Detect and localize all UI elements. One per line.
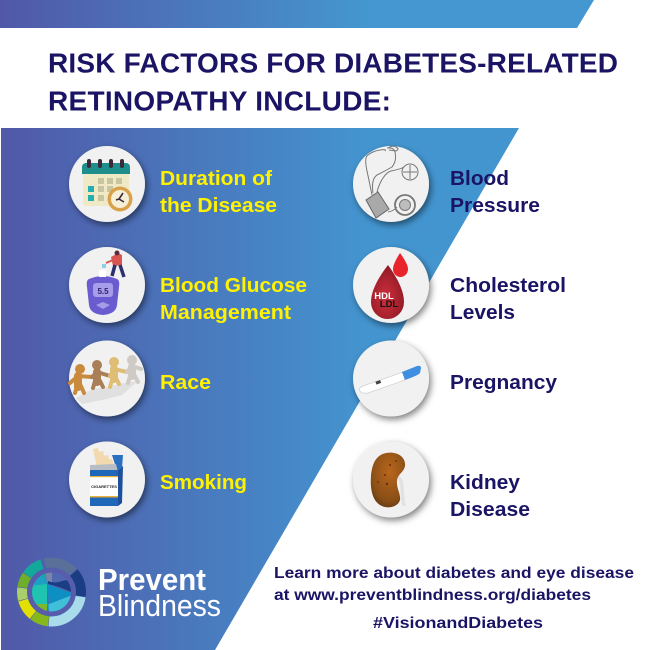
logo wordmark: Prevent: [98, 562, 206, 597]
label: kidney disease: [450, 471, 530, 521]
logo mark: [22, 562, 81, 622]
label: smoking: Smoking: [160, 471, 247, 494]
icon: blood pressure cuff: [353, 146, 429, 222]
icon: pregnancy test: [353, 340, 429, 416]
label: kidney disease: Disease: [450, 498, 530, 521]
call to action text: #VisionandDiabetes: [373, 615, 543, 632]
label: pregnancy: Pregnancy: [450, 371, 558, 394]
label: duration of the disease: Duration of: [160, 167, 272, 190]
label: blood pressure: Blood: [450, 167, 509, 190]
icon: calendar and clock: [69, 146, 145, 222]
call to action text: [274, 565, 634, 632]
title: RISK FACTORS FOR DIABETES-RELATED: [48, 48, 618, 78]
icon: glucose meter: [69, 247, 145, 323]
call to action text: Learn more about diabetes and eye disease: [274, 565, 634, 582]
logo: Prevent Blindness: [22, 562, 221, 623]
icon: blood drop HDL LDL: HDL: [374, 291, 394, 302]
title: RETINOPATHY INCLUDE:: [48, 86, 391, 116]
top banner: [0, 0, 594, 28]
icon: blood drop HDL LDL: LDL: [380, 299, 398, 310]
label: blood pressure: [450, 167, 540, 217]
main gradient panel: [1, 128, 519, 650]
icon: glucose meter: 5.5: [97, 287, 109, 296]
label: cholesterol levels: Levels: [450, 301, 515, 324]
label: duration of the disease: [160, 167, 277, 217]
label: cholesterol levels: [450, 274, 566, 324]
icon: blood drop HDL LDL: [353, 247, 429, 323]
label: race: Race: [160, 371, 211, 394]
icon: cigarette pack: [69, 442, 145, 518]
label: blood glucose management: Blood Glucose: [160, 274, 307, 297]
title: [48, 48, 618, 116]
label: duration of the disease: the Disease: [160, 194, 277, 217]
label: blood pressure: Pressure: [450, 194, 540, 217]
label: blood glucose management: [160, 274, 307, 324]
call to action text: at www.preventblindness.org/diabetes: [274, 587, 591, 604]
icon: cigarette pack: CIGARETTES: [91, 484, 117, 489]
icon: paper people: [69, 340, 145, 416]
logo: Prevent Blindness: Blindness: [98, 588, 221, 623]
label: kidney disease: Kidney: [450, 471, 521, 494]
label: cholesterol levels: Cholesterol: [450, 274, 566, 297]
label: blood glucose management: Management: [160, 301, 291, 324]
icon: kidney: [353, 442, 429, 518]
